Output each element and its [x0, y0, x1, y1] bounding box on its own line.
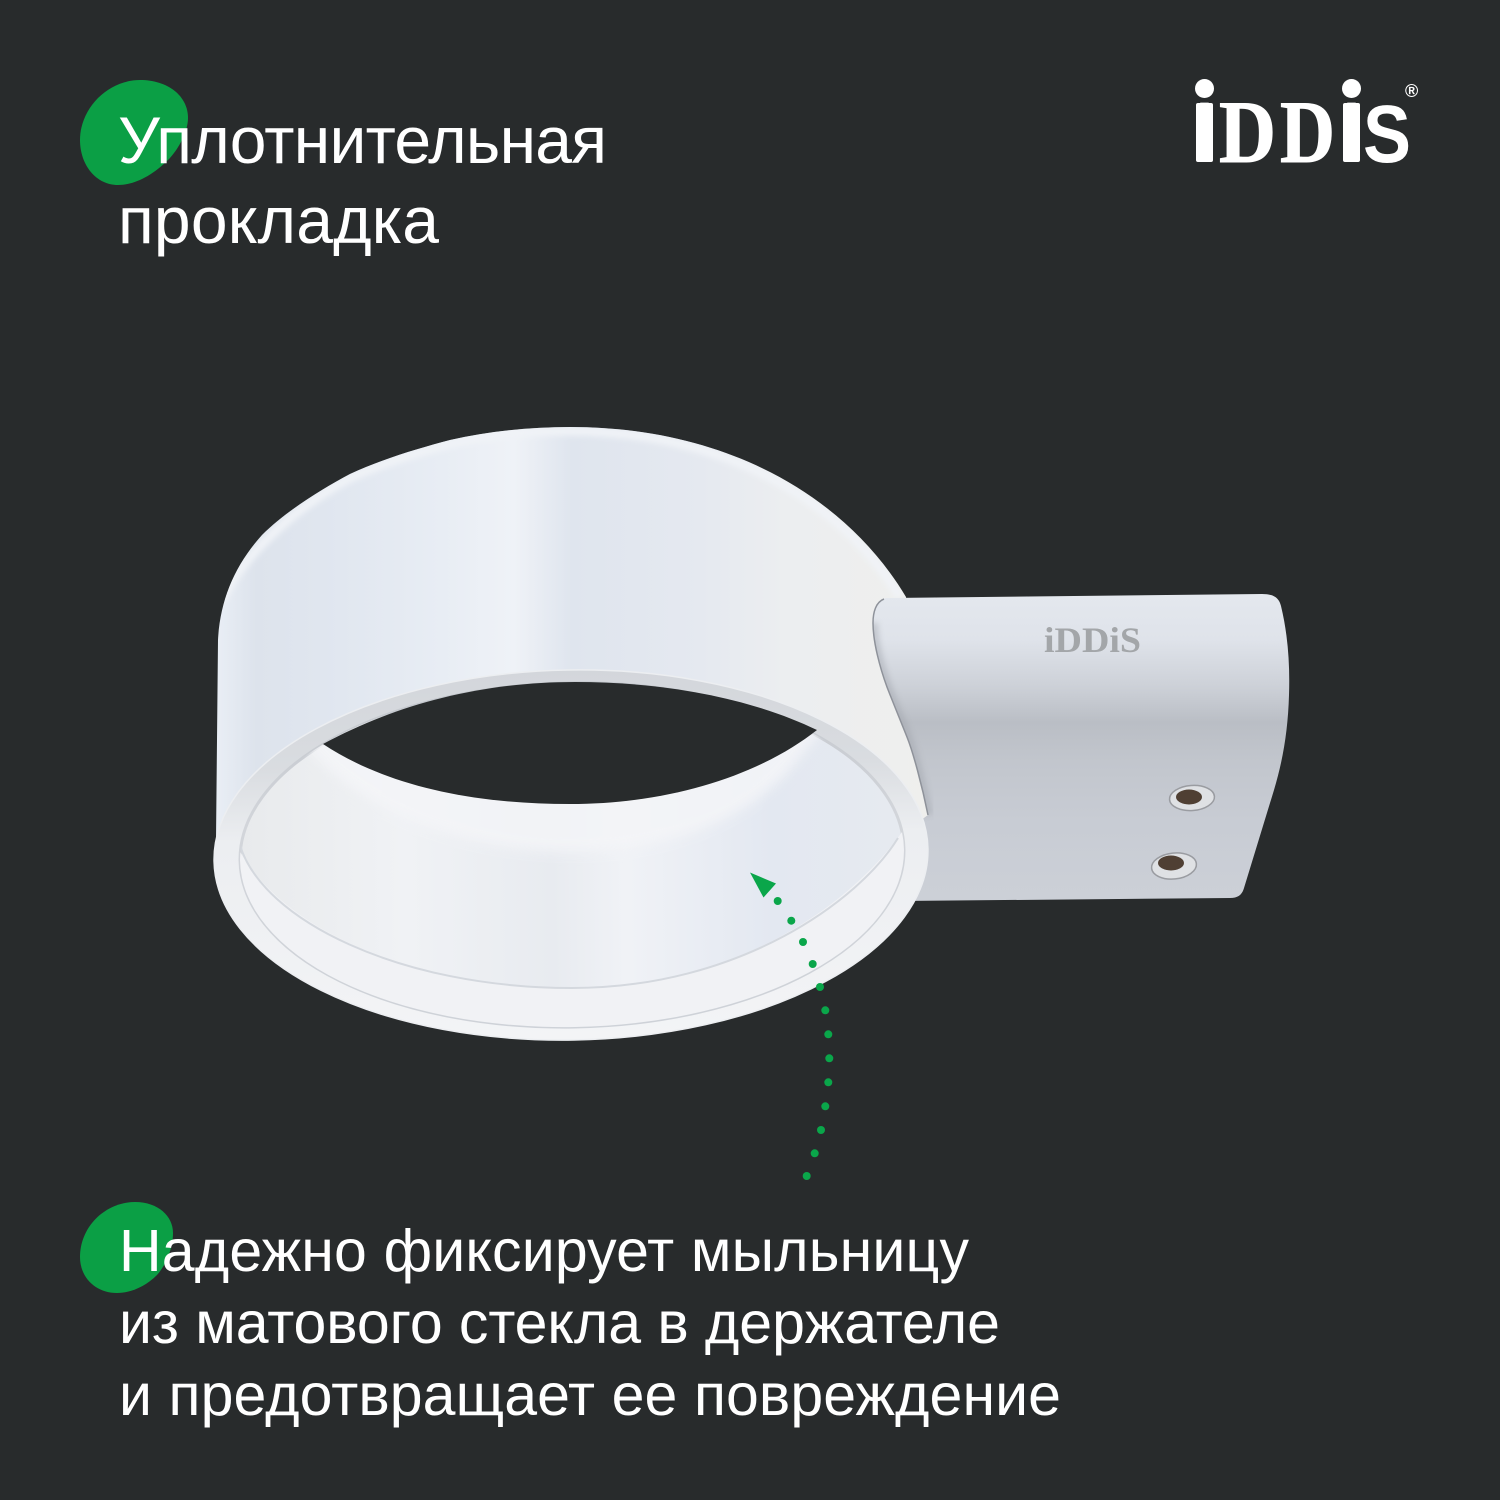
- description text: [119, 1218, 1061, 1428]
- description text: из матового стекла в держателе: [119, 1290, 1000, 1356]
- dotted arrow pointing at gasket: [750, 872, 833, 1180]
- green blob: heading accent: [80, 80, 188, 185]
- description text: и предотвращает ее повреждение: [119, 1362, 1061, 1428]
- ring hole: [323, 682, 817, 804]
- inner groove: [240, 838, 898, 988]
- bracket collar edge: [873, 599, 928, 815]
- logo: iDDiS: [1195, 61, 1418, 186]
- ring outer band: [216, 427, 936, 1000]
- ring lower rim: [211, 664, 931, 1046]
- inner lower lip: [230, 720, 910, 1040]
- screw lower: [1150, 851, 1198, 881]
- inner upper ridge: [300, 720, 830, 852]
- bracket body: [873, 594, 1289, 901]
- logo: iDDiS: S: [1363, 89, 1411, 180]
- bracket engraved logo: iDDiS: [1044, 620, 1141, 660]
- screw upper: [1169, 784, 1215, 812]
- logo: iDDiS: ®: [1405, 81, 1418, 101]
- logo: iDDiS: D: [1219, 84, 1276, 182]
- title: прокладка: [118, 183, 439, 257]
- product: gasket holder: [211, 427, 1289, 1046]
- title: Уплотнительная: [118, 103, 607, 177]
- ring top lip highlight: [222, 431, 900, 600]
- title: [118, 103, 607, 257]
- logo: iDDiS: D: [1280, 84, 1335, 182]
- description text: Надежно фиксирует мыльницу: [119, 1218, 970, 1284]
- logo: iDDiS: i: [1196, 61, 1213, 186]
- logo: iDDiS: i: [1343, 61, 1360, 186]
- green blob: description accent: [80, 1202, 173, 1293]
- ring inner surface: [237, 677, 907, 1033]
- bracket collar shadow: [873, 623, 928, 815]
